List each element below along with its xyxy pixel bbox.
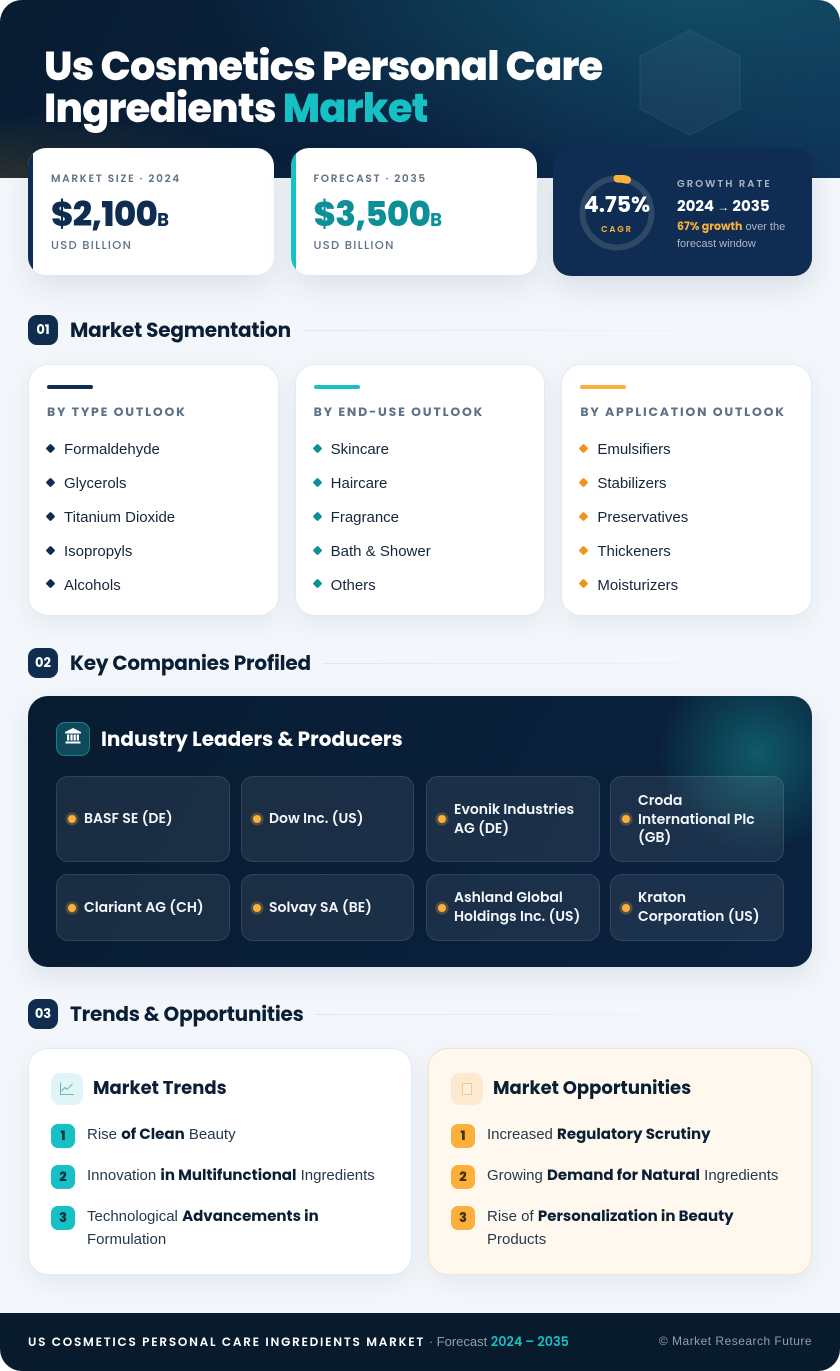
panel: market trends: Formulation xyxy=(87,1230,166,1248)
company: Clariant: Clariant AG (CH) xyxy=(84,897,204,917)
panel: by end-use outlook xyxy=(295,364,545,616)
panel: by end-use outlook: Fragrance xyxy=(331,509,399,526)
panel: by type outlook: Alcohols xyxy=(64,577,121,594)
company: Dow: Dow Inc. (US) xyxy=(269,808,364,828)
header banner xyxy=(0,0,840,178)
panel: by application outlook: Thickeners xyxy=(597,543,671,560)
panel: market opportunities: Market Opportunities xyxy=(493,1076,691,1101)
stat card: growth rate: forecast window xyxy=(677,238,756,250)
panel: by end-use outlook: Bath & Shower xyxy=(331,543,431,560)
company: Ashland xyxy=(426,874,600,941)
stat card: market size xyxy=(28,148,274,275)
footer xyxy=(0,1313,840,1371)
company: Kraton xyxy=(610,874,784,941)
panel: market opportunities: 2 xyxy=(459,1167,467,1186)
panel: market opportunities xyxy=(428,1048,812,1275)
panel: by application outlook: Stabilizers xyxy=(597,475,667,492)
panel: by type outlook: Isopropyls xyxy=(64,543,132,560)
stat card: forecast: $3,500B xyxy=(314,190,442,238)
section number: 01 xyxy=(36,320,50,339)
stat card: growth rate: GROWTH RATE xyxy=(677,176,772,191)
stat card: forecast: USD BILLION xyxy=(314,238,395,254)
section heading: market segmentation xyxy=(28,315,606,345)
icon: missing glyph box xyxy=(451,1073,483,1105)
title: Ingredients Market xyxy=(44,80,428,136)
panel: market trends: 3 xyxy=(59,1208,67,1227)
panel: by type outlook: Titanium Dioxide xyxy=(64,509,175,526)
stat card: market size: MARKET SIZE · 2024 xyxy=(51,171,181,186)
company: Evonik: Evonik Industries xyxy=(454,799,574,819)
company: BASF: BASF SE (DE) xyxy=(84,808,173,828)
icon: chart xyxy=(51,1073,83,1105)
section number xyxy=(28,999,58,1029)
company: Ashland: Ashland Global xyxy=(454,887,563,907)
section number xyxy=(28,648,58,678)
panel: market trends: Technological Advancements in xyxy=(87,1206,319,1227)
panel: companies xyxy=(28,696,812,967)
stat card: growth rate: 67% growth over the xyxy=(677,218,785,234)
company: Evonik: AG (DE) xyxy=(454,818,509,838)
section number: 03 xyxy=(35,1004,51,1023)
panel: by type outlook: Glycerols xyxy=(64,475,127,492)
panel: market opportunities: Growing Demand for Natural Ingredients xyxy=(487,1165,778,1186)
company: Croda: (GB) xyxy=(638,827,671,847)
section heading: key companies xyxy=(28,648,614,678)
title xyxy=(44,38,602,136)
panel: by end-use outlook: Skincare xyxy=(331,441,389,458)
company: Kraton: Kraton xyxy=(638,887,686,907)
company: Solvay: Solvay SA (BE) xyxy=(269,897,372,917)
stat card: market size: $2,100B xyxy=(51,190,169,238)
panel: by application outlook: Emulsifiers xyxy=(597,441,671,458)
panel: by type outlook: BY TYPE OUTLOOK xyxy=(47,404,187,421)
company: BASF xyxy=(56,776,230,862)
footer credit: © Market Research Future xyxy=(659,1334,812,1348)
stat card: growth rate: 2024 → 2035 xyxy=(677,196,770,217)
footer title: US COSMETICS PERSONAL CARE INGREDIENTS MARKET · Forecast 2024 – 2035 xyxy=(28,1334,569,1351)
panel: market opportunities: 1 xyxy=(460,1126,466,1145)
panel: by application outlook xyxy=(561,364,812,616)
cagr ring xyxy=(580,175,654,250)
decorative hexagon xyxy=(640,30,740,136)
company: Ashland: Holdings Inc. (US) xyxy=(454,906,580,926)
company: Croda: Croda xyxy=(638,790,682,810)
panel: market trends: 2 xyxy=(59,1167,67,1186)
panel: by type outlook: Formaldehyde xyxy=(64,441,160,458)
company: Clariant xyxy=(56,874,230,941)
section heading: key companies: Key Companies Profiled xyxy=(70,649,311,677)
section number: 02 xyxy=(35,653,51,672)
icon: bank xyxy=(56,722,90,756)
panel: market opportunities: Rise of Personalization in Beauty xyxy=(487,1206,734,1227)
panel: by end-use outlook: Haircare xyxy=(331,475,387,492)
stat card: market size: USD BILLION xyxy=(51,238,132,254)
panel: market trends: Rise of Clean Beauty xyxy=(87,1124,236,1145)
panel: by end-use outlook: Others xyxy=(331,577,376,594)
stat card: growth rate: 4.75% xyxy=(584,189,650,220)
stat card: forecast: FORECAST · 2035 xyxy=(314,171,427,186)
title: Us Cosmetics Personal Care xyxy=(44,38,602,94)
panel: by end-use outlook: BY END-USE OUTLOOK xyxy=(314,404,484,421)
panel: market opportunities: Increased Regulatory Scrutiny xyxy=(487,1124,711,1145)
company: Croda xyxy=(610,776,784,862)
stat card: forecast xyxy=(291,148,537,275)
panel: market trends: Market Trends xyxy=(93,1076,227,1101)
panel: market opportunities: Products xyxy=(487,1230,546,1248)
panel: market opportunities: 3 xyxy=(459,1208,467,1227)
company: Evonik xyxy=(426,776,600,862)
stat card: growth rate xyxy=(553,148,812,276)
company: Solvay xyxy=(241,874,414,941)
section heading: market segmentation: Market Segmentation xyxy=(70,316,291,344)
panel: by application outlook: BY APPLICATION OUTLOOK xyxy=(580,404,786,421)
company: Croda: International Plc xyxy=(638,809,755,829)
panel: by application outlook: Moisturizers xyxy=(597,577,678,594)
panel: market trends: 1 xyxy=(60,1126,66,1145)
panel: by application outlook: Preservatives xyxy=(597,509,688,526)
section number xyxy=(28,315,58,345)
section heading: trends and opportunities: Trends & Opportunities xyxy=(70,1000,304,1028)
company: Dow xyxy=(241,776,414,862)
company: Kraton: Corporation (US) xyxy=(638,906,760,926)
panel: market trends: Innovation in Multifunctional Ingredients xyxy=(87,1165,375,1186)
panel: market trends xyxy=(28,1048,412,1275)
section heading: trends and opportunities xyxy=(28,999,610,1029)
stat card: growth rate: CAGR xyxy=(601,223,633,235)
panel heading: Industry Leaders & Producers xyxy=(101,725,403,753)
panel: by type outlook xyxy=(28,364,279,616)
